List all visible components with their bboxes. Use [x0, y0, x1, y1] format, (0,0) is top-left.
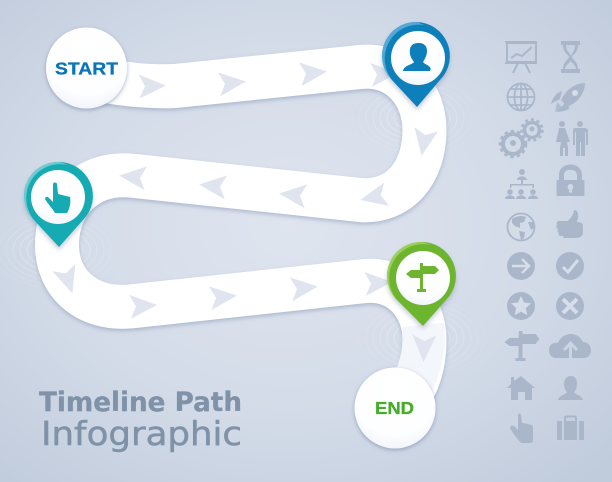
title: Infographic: [41, 414, 242, 453]
icon: pointing hand: [45, 182, 70, 213]
icon: check badge: [556, 252, 584, 280]
icon: rocket: [551, 83, 585, 112]
icon: signpost: [406, 263, 439, 292]
icon: person: [558, 376, 583, 400]
start circle: [46, 28, 127, 108]
end circle: [354, 368, 436, 448]
start circle: START: [55, 58, 118, 78]
green location marker: [387, 242, 456, 326]
icon: woman and man: [556, 121, 588, 156]
teal location marker: [24, 162, 93, 247]
icon: person bust: [403, 43, 431, 71]
icon: padlock: [556, 164, 584, 196]
icon: hourglass: [561, 41, 580, 73]
end circle: END: [375, 398, 414, 418]
icon: house: [507, 376, 535, 400]
title: [39, 387, 242, 453]
icon: cross badge: [556, 292, 584, 320]
blue location marker: [382, 22, 450, 107]
icon: upload cloud: [549, 334, 591, 358]
icon: gears: [500, 120, 542, 157]
title: Timeline Path: [39, 387, 242, 418]
ripples: teal marker: [0, 212, 118, 288]
icon: signpost: [504, 331, 540, 361]
icon: briefcase: [557, 416, 584, 440]
icon: globe: [508, 84, 534, 110]
icon: earth: [508, 214, 534, 240]
icon: org chart: [505, 169, 538, 199]
ripples: green marker: [359, 300, 485, 376]
icon column: [500, 41, 591, 443]
icon: arrow badge: [507, 252, 535, 280]
icon: thumbs up: [556, 210, 583, 238]
road end tint: [395, 325, 424, 410]
winding timeline road: [57, 67, 424, 410]
icon: presentation board: [505, 42, 537, 73]
icon: star badge: [507, 292, 535, 320]
ripples: blue marker: [352, 80, 478, 156]
road direction arrows: [53, 60, 438, 362]
icon: hand: [510, 414, 533, 443]
